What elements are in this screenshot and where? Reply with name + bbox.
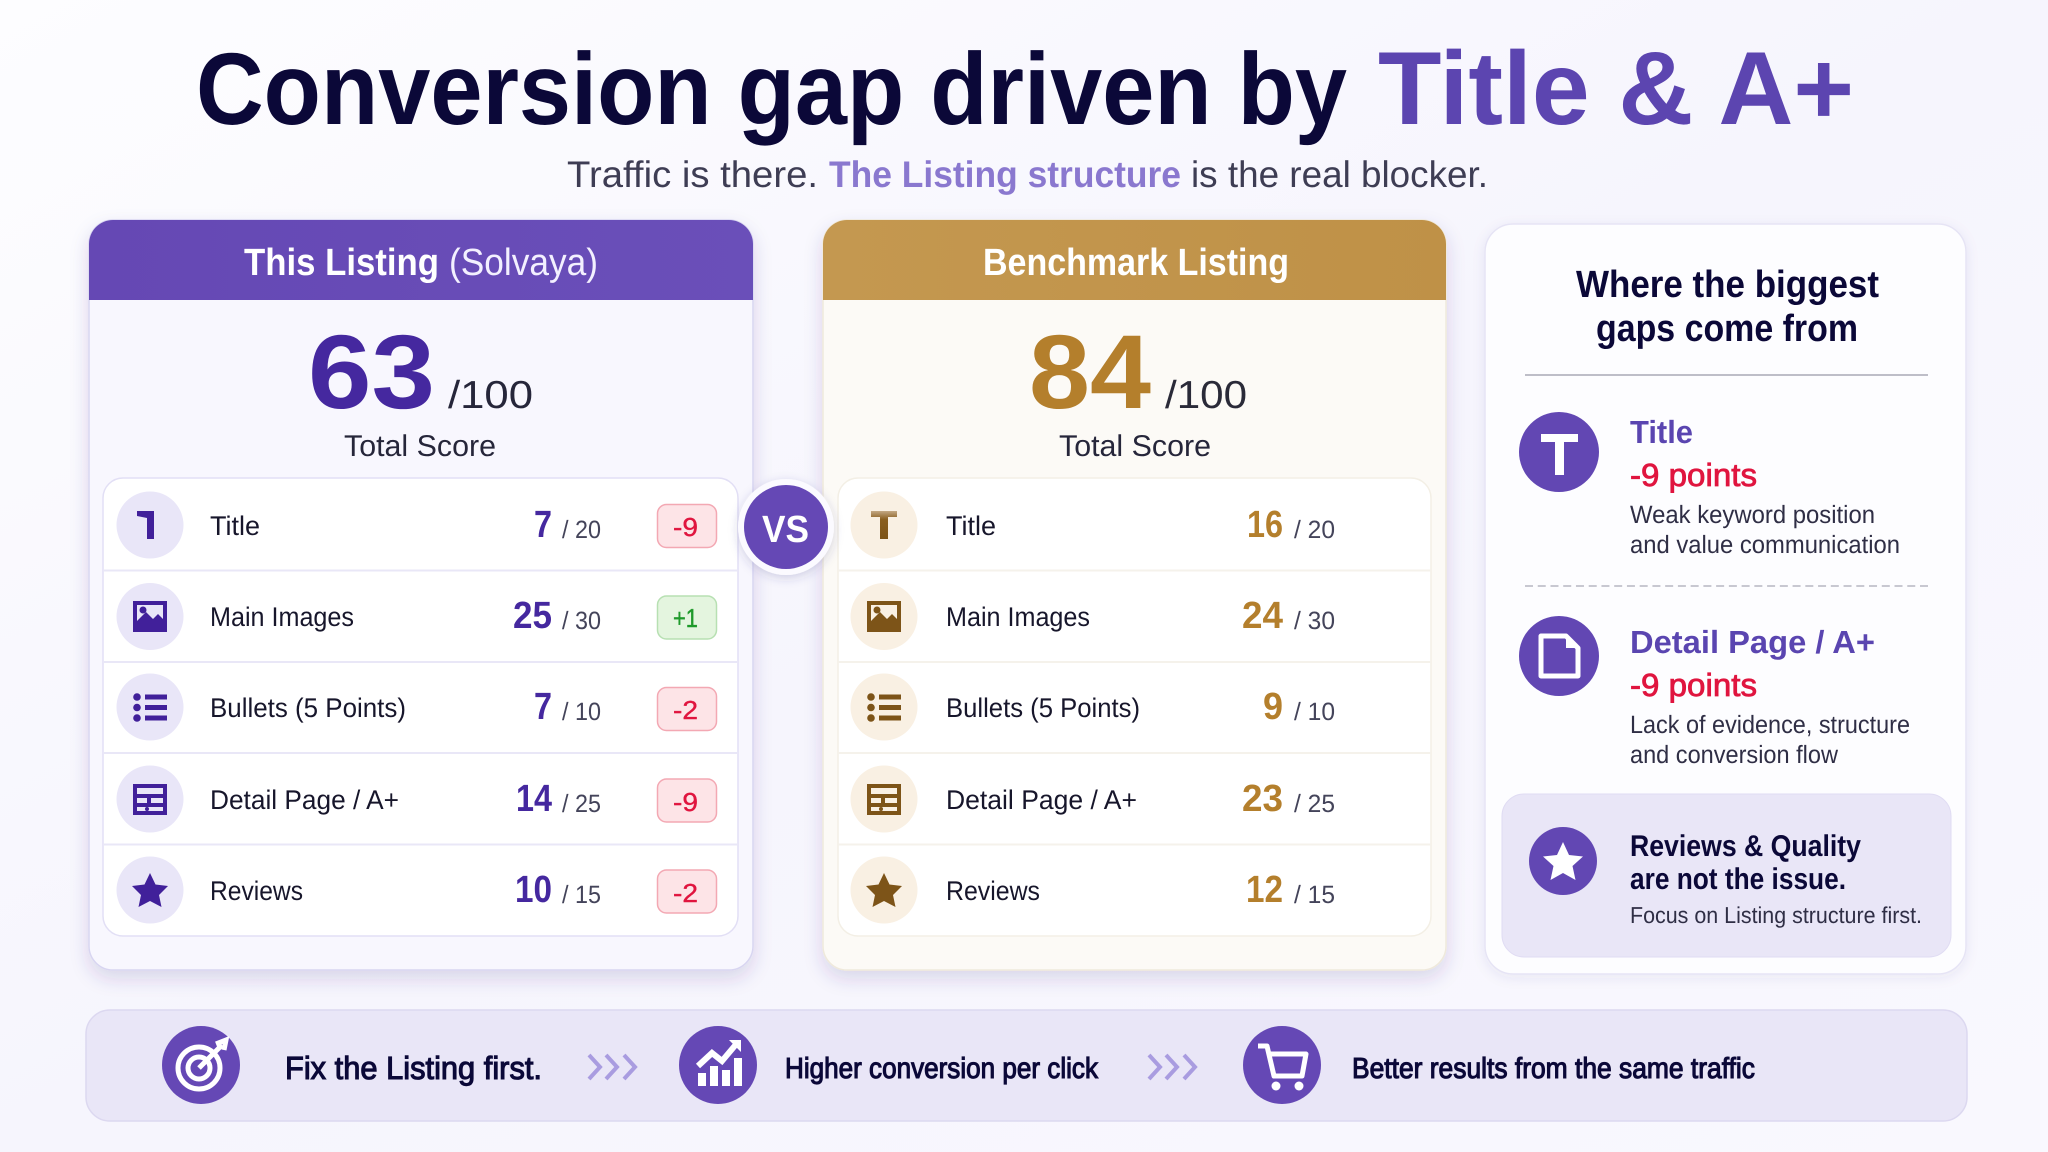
- title: Title & A+: [1378, 31, 1854, 147]
- gap item: title: and value communication: [1630, 531, 1900, 559]
- icon: target: [162, 1026, 240, 1104]
- row: main images: [850, 583, 1335, 650]
- icon: chart: [679, 1026, 757, 1104]
- row: title: -9: [673, 512, 698, 542]
- total score: 63: 63: [308, 314, 435, 431]
- panel heading: [1576, 264, 1879, 350]
- row: bullets: / 10: [1294, 698, 1335, 726]
- panel: biggest gaps: [1485, 224, 1966, 974]
- panel header: benchmark listing: Benchmark Listing: [983, 242, 1289, 284]
- row: reviews: 10: [515, 869, 552, 911]
- row: bullets: / 10: [562, 698, 601, 726]
- row: reviews: / 15: [562, 881, 601, 909]
- total score: 63: /100: [448, 374, 533, 417]
- row: title: / 20: [562, 516, 601, 544]
- gap item: detail page: Detail Page / A+: [1630, 624, 1875, 660]
- row: reviews: [850, 856, 1335, 924]
- arrow: chevrons: [1149, 1055, 1195, 1079]
- total score: 84: [1029, 314, 1247, 463]
- row: title: Title: [210, 511, 260, 541]
- step: fix the listing: Fix the Listing first.: [285, 1050, 542, 1086]
- subtitle: [567, 154, 1488, 195]
- row: bullets: -2: [673, 695, 698, 725]
- row: detail page: [116, 766, 716, 832]
- score table: benchmark: [838, 478, 1431, 936]
- row: bullets: [116, 674, 716, 740]
- gap item: detail page: [1519, 616, 1910, 769]
- row: detail page: Detail Page / A+: [946, 785, 1137, 815]
- row: bullets: Bullets (5 Points): [210, 693, 406, 723]
- total score: 63: Total Score: [344, 430, 496, 463]
- row: bullets: 9: [1263, 686, 1283, 728]
- panel header: benchmark listing: [823, 220, 1446, 300]
- total score: 63: [308, 314, 533, 463]
- row: bullets: Bullets (5 Points): [946, 693, 1140, 723]
- panel: this listing: [89, 220, 753, 970]
- bottom action bar: [86, 1010, 1967, 1121]
- row: reviews: 12: [1246, 869, 1283, 911]
- row: main images: [116, 583, 716, 650]
- subtitle: is the real blocker.: [1191, 154, 1488, 195]
- panel heading: Where the biggest: [1576, 264, 1879, 306]
- callout: reviews and quality: are not the issue.: [1630, 863, 1846, 896]
- row: main images: Main Images: [946, 602, 1090, 632]
- row: detail page: Detail Page / A+: [210, 785, 399, 815]
- panel header: this listing: (Solvaya): [449, 242, 598, 284]
- row: main images: +1: [673, 603, 698, 633]
- row: reviews: / 15: [1294, 881, 1335, 909]
- total score: 84: Total Score: [1059, 430, 1211, 463]
- step: better results: Better results from the same traffic: [1352, 1053, 1755, 1085]
- gap item: title: Weak keyword position: [1630, 501, 1875, 529]
- row: reviews: Reviews: [946, 876, 1040, 906]
- row: main images: / 30: [562, 607, 601, 635]
- subtitle: Traffic is there.: [567, 154, 818, 195]
- row: title: [116, 492, 716, 558]
- icon: cart: [1243, 1026, 1321, 1104]
- subtitle: The Listing structure: [829, 154, 1181, 195]
- row: title: [850, 492, 1335, 558]
- callout: reviews and quality: [1502, 794, 1951, 957]
- row: title: 7: [534, 504, 552, 546]
- row: main images: 25: [513, 595, 552, 637]
- step: better results: [1243, 1026, 1755, 1104]
- callout: reviews and quality: Reviews & Quality: [1630, 830, 1861, 863]
- icon: document: [1519, 616, 1599, 696]
- row: detail page: 23: [1242, 778, 1283, 820]
- row: bullets: [850, 674, 1335, 740]
- gap item: detail page: -9 points: [1630, 667, 1757, 703]
- row: main images: 24: [1242, 595, 1283, 637]
- row: detail page: / 25: [562, 790, 601, 818]
- step: higher conversion: Higher conversion per click: [785, 1053, 1098, 1085]
- row: reviews: Reviews: [210, 876, 303, 906]
- row: reviews: -2: [673, 878, 698, 908]
- gap item: title: Title: [1630, 414, 1693, 450]
- row: reviews: [116, 856, 716, 924]
- step: fix the listing: [162, 1026, 542, 1104]
- arrow: chevrons: [589, 1055, 635, 1079]
- step: higher conversion: [679, 1026, 1098, 1104]
- row: title: / 20: [1294, 516, 1335, 544]
- score table: this listing: [103, 478, 738, 936]
- row: detail page: / 25: [1294, 790, 1335, 818]
- vs badge: VS: [762, 509, 809, 551]
- row: detail page: 14: [516, 778, 552, 820]
- icon: star: [1529, 827, 1597, 895]
- icon: T: [1519, 412, 1599, 492]
- panel: benchmark listing: [823, 220, 1446, 970]
- gap item: detail page: and conversion flow: [1630, 741, 1839, 769]
- row: bullets: 7: [534, 686, 552, 728]
- panel header: this listing: This Listing: [244, 242, 439, 284]
- row: detail page: [850, 766, 1335, 832]
- panel heading: gaps come from: [1596, 308, 1858, 350]
- gap item: detail page: Lack of evidence, structure: [1630, 711, 1910, 739]
- gap item: title: [1519, 412, 1900, 559]
- row: title: Title: [946, 511, 996, 541]
- total score: 84: /100: [1165, 374, 1247, 417]
- title: Conversion gap driven by: [196, 32, 1347, 146]
- callout: reviews and quality: Focus on Listing structure first.: [1630, 902, 1922, 928]
- row: title: 16: [1247, 504, 1283, 546]
- row: main images: / 30: [1294, 607, 1335, 635]
- vs badge: [738, 479, 834, 575]
- row: detail page: -9: [673, 787, 698, 817]
- gap item: title: -9 points: [1630, 457, 1757, 493]
- total score: 84: 84: [1029, 314, 1151, 431]
- panel header: this listing: [89, 220, 753, 300]
- row: main images: Main Images: [210, 602, 354, 632]
